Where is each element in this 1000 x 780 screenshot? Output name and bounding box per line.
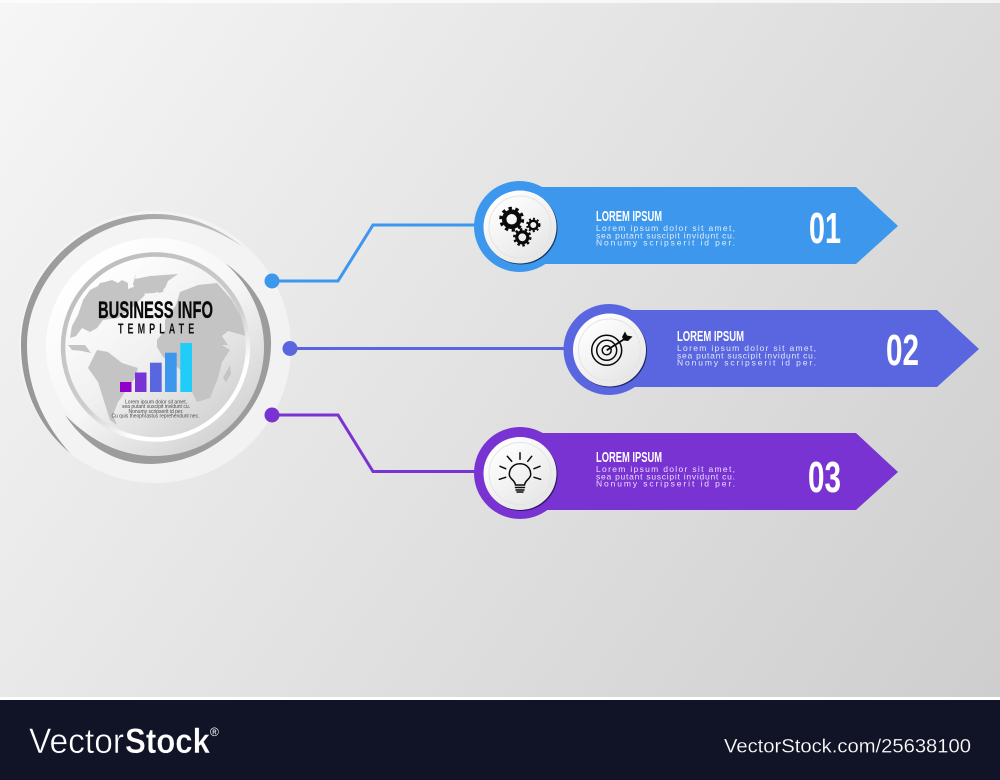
connector 1 (264, 225, 485, 288)
madagascar (223, 365, 231, 382)
white disc (46, 238, 264, 456)
panel: banner 02 (564, 304, 979, 395)
body text: sea putant suscipit invidunt cu. (596, 472, 735, 482)
button (484, 190, 556, 264)
south america (88, 350, 138, 425)
body text: Lorem ipsum dolor sit amet, (596, 223, 735, 233)
globe caption text (112, 400, 200, 420)
body text: sea putant suscipit invidunt cu. (677, 350, 816, 360)
globe caption text: Nonumy scripserit id per. (128, 409, 184, 415)
arrow banner shape (609, 310, 979, 387)
button (573, 314, 646, 386)
panel: banner 01 (474, 181, 898, 272)
footer logo: ® (210, 725, 219, 739)
globe caption text: sea putant suscipit invidunt cu. (122, 404, 190, 410)
heading: LOREM IPSUM (596, 208, 662, 225)
button shadow (484, 192, 558, 264)
heading: LOREM IPSUM (596, 449, 662, 466)
arctic island (158, 288, 164, 293)
number 02: 02 (886, 326, 919, 375)
bar chart (120, 343, 192, 392)
body text: Nonumy scripserit id per. (677, 358, 816, 368)
globe caption text: Lorem ipsum dolor sit amet, (125, 400, 187, 406)
central globe emblem (19, 211, 291, 483)
icon: light bulb (499, 453, 541, 492)
banner circle (474, 181, 565, 272)
arrow banner shape (520, 187, 898, 264)
footer bar (0, 700, 1000, 780)
button (484, 437, 556, 510)
number 03: 03 (808, 453, 841, 502)
connector 2 (282, 341, 570, 356)
footer logo: Stock (125, 722, 210, 761)
footer image id: VectorStock.com/25638100 (724, 736, 971, 758)
pale halo circle (19, 211, 291, 483)
connector 3 (264, 408, 485, 472)
world map (68, 273, 246, 425)
north america (70, 280, 145, 338)
panel: banner 03 (474, 427, 898, 519)
title: business info: BUSINESS INFO (98, 297, 213, 324)
eurasia and africa (157, 283, 246, 402)
button shadow (574, 314, 647, 388)
body text: sea putant suscipit invidunt cu. (596, 230, 735, 240)
banner circle (564, 304, 654, 395)
body text (596, 464, 735, 489)
number 01: 01 (809, 204, 841, 253)
greenland (133, 273, 178, 294)
body text: Lorem ipsum dolor sit amet, (596, 464, 735, 474)
body text: Nonumy scripserit id per. (596, 479, 735, 489)
globe caption text: Cu quis theophrastus reprehendunt nec. (112, 414, 200, 420)
footer logo: Vector (29, 722, 124, 761)
icon: target (592, 332, 632, 365)
body text: Nonumy scripserit id per. (596, 238, 735, 248)
heading: LOREM IPSUM (677, 328, 744, 345)
globe ring and face (63, 254, 248, 440)
subtitle: template: TEMPLATE (118, 320, 194, 337)
body text (596, 223, 735, 248)
lower right grey crescent (65, 263, 271, 464)
arrow banner shape (520, 433, 898, 510)
footer logo (29, 722, 219, 761)
body text: Lorem ipsum dolor sit amet, (677, 343, 816, 353)
icon: gears (501, 208, 540, 245)
upper left grey crescent (21, 214, 243, 453)
banner circle (474, 427, 566, 519)
central america (68, 345, 91, 353)
body text (677, 343, 816, 368)
button shadow (484, 438, 558, 511)
